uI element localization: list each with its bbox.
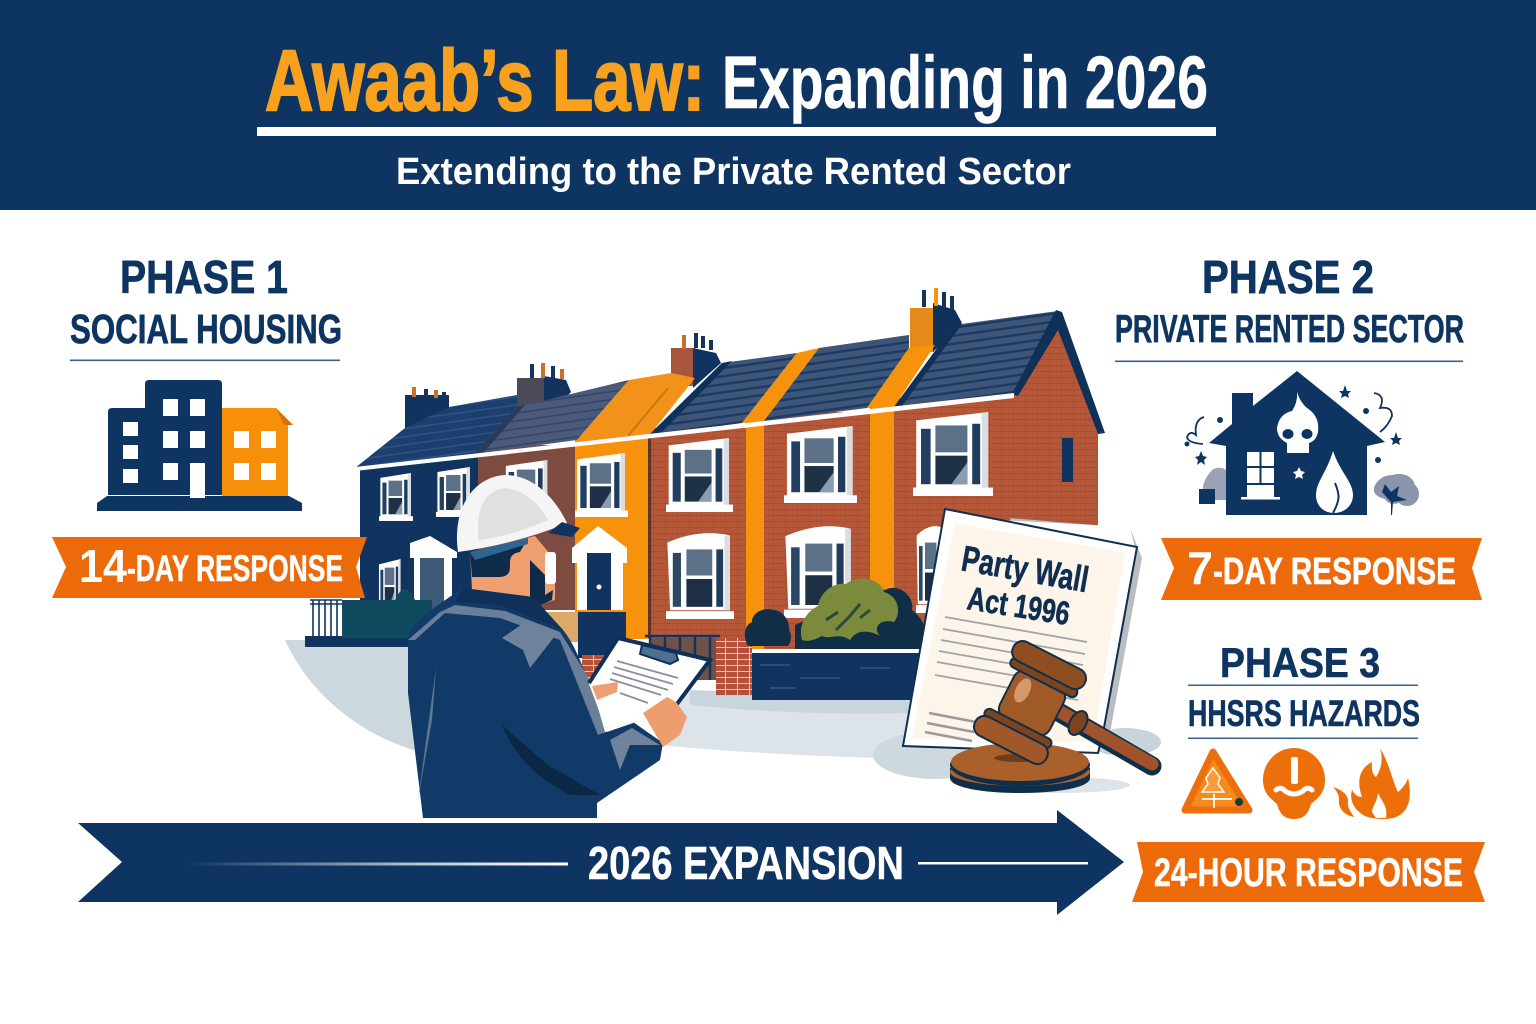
- terraced houses: [305, 288, 1105, 700]
- phase 2 heading: [1115, 251, 1464, 362]
- phase 1 heading: SOCIAL HOUSING: [70, 306, 342, 352]
- phase 3 heading: HHSRS HAZARDS: [1188, 693, 1420, 734]
- banner: 7-day response: 7: [1187, 542, 1213, 594]
- phase 3 heading: [1188, 639, 1420, 739]
- document: Party Wall Act 1996: Act 1996: [965, 579, 1072, 632]
- phase 1 heading: PHASE 1: [120, 251, 288, 303]
- porch door: navy house: [410, 536, 457, 610]
- chimneys: [405, 288, 962, 440]
- expansion arrow: 2026 EXPANSION: [588, 837, 904, 889]
- clipboard: [589, 638, 710, 732]
- handle: [1057, 708, 1152, 766]
- house walls: [360, 325, 1098, 652]
- title: [257, 33, 1216, 136]
- head: [971, 638, 1089, 767]
- roofs: [355, 310, 1105, 471]
- sound block: [950, 743, 1090, 793]
- upper windows: [379, 412, 993, 521]
- banner: 7-day response: [1161, 538, 1482, 600]
- banner: 7-day response: -DAY RESPONSE: [1213, 551, 1456, 593]
- banner: 14-day response: -DAY RESPONSE: [127, 548, 343, 589]
- hands: [592, 682, 687, 747]
- icon: social housing buildings: [97, 380, 302, 511]
- hard hat: [457, 475, 580, 552]
- document: Party Wall Act 1996: [873, 509, 1161, 793]
- subtitle: Extending to the Private Rented Sector: [396, 151, 1071, 193]
- icon: flame: [1333, 748, 1410, 819]
- icon: hazard triangle: [1185, 752, 1249, 810]
- document: Party Wall Act 1996: Party Wall: [959, 538, 1092, 600]
- gavel: [950, 638, 1152, 793]
- expansion arrow: [78, 810, 1124, 915]
- phase 3 heading: PHASE 3: [1220, 639, 1380, 686]
- icon: hazard warning head: [1263, 748, 1325, 819]
- banner: 24-hour response: [1132, 842, 1485, 902]
- lower windows: [378, 526, 946, 619]
- inspector with clipboard: [408, 475, 710, 818]
- porch door: orange house: [572, 526, 627, 610]
- banner: 14-day response: 14: [79, 540, 127, 592]
- title: Expanding in 2026: [722, 41, 1208, 124]
- head and mask: [470, 536, 556, 610]
- icon: hazardous house: [1184, 371, 1419, 515]
- header band: [0, 0, 1536, 210]
- shrubs: [745, 578, 927, 653]
- jacket: [408, 588, 663, 818]
- phase 2 heading: PHASE 2: [1202, 251, 1374, 303]
- front fence and railings: [305, 589, 927, 700]
- ground wash: [285, 640, 1000, 760]
- banner: 14-day response: [52, 537, 367, 598]
- side vent: [1062, 438, 1073, 482]
- title: Awaab’s Law:: [265, 33, 705, 129]
- phase 1 heading: [70, 251, 342, 361]
